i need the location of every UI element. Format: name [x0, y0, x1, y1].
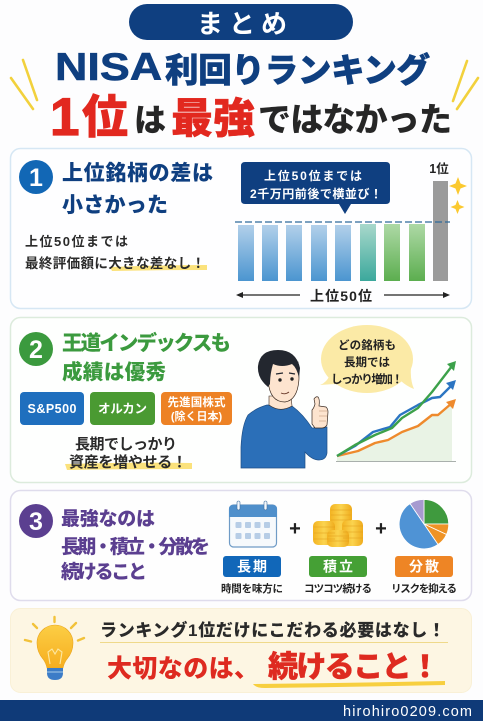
chip: 先進国株式: (除く日本) [171, 409, 222, 423]
callout: 横並び [241, 162, 390, 214]
title line 1 [55, 45, 430, 90]
icon: coins [313, 504, 363, 547]
callout: 横並び: 上位50位までは [264, 168, 362, 183]
footer bar: hirohiro0209.com [343, 704, 472, 720]
title line 1: NISA [55, 45, 162, 88]
number badge 1 [19, 160, 53, 194]
panel 2 heading: 王道インデックスも [62, 331, 231, 355]
chip: 先進国株式 [161, 392, 232, 425]
speech bubble [320, 325, 414, 393]
panel 2 heading: 成績は優秀 [62, 360, 166, 384]
panel 3 background [10, 490, 472, 600]
chip: 積立: 積立 [323, 558, 353, 574]
panel 4: conclusion [10, 608, 472, 692]
plus sign 1: + [289, 518, 301, 540]
panel 2 message: 資産を増やせる！ [69, 453, 187, 471]
plus sign 2: + [375, 518, 387, 540]
panel 2 message: 長期でしっかり [75, 436, 177, 453]
chip: S&amp;P500 [20, 392, 84, 425]
caption: コツコツ続ける: コツコツ続ける [304, 582, 372, 595]
chip: 積立 [309, 556, 367, 577]
title line 2 [50, 88, 452, 147]
panel 1 heading: 上位銘柄の差は [62, 162, 213, 185]
chip: オルカン [90, 392, 155, 425]
panel 1 heading [62, 162, 213, 217]
chip: 長期: 長期 [237, 558, 267, 574]
panel 3 heading: 最強なのは [61, 508, 155, 530]
panel 3: 長期・積立・分散 [10, 490, 472, 600]
accent lines: left [11, 60, 37, 109]
panel 1 body text: 上位50位までは [25, 234, 128, 249]
caption: 時間を味方に: 時間を味方に [221, 582, 283, 595]
divider [100, 642, 448, 644]
panel 2: 王道インデックス [10, 318, 472, 482]
badge: まとめ: まとめ [197, 9, 287, 39]
panel 1: 上位銘柄の差 [10, 148, 472, 308]
chip: 分散 [395, 556, 453, 577]
title line 2: 最強 [171, 95, 255, 142]
title line 1: 利回りランキング [165, 52, 430, 90]
chip: 分散: 分散 [409, 558, 439, 574]
chip: 長期 [223, 556, 281, 577]
panel 3 heading: 長期・積立・分散を [61, 535, 210, 558]
title line 2: 1 [50, 88, 79, 147]
number badge 2 [19, 332, 53, 366]
callout: 横並び: 2千万円前後で横並び！ [250, 186, 382, 201]
panel 3 heading [61, 508, 210, 583]
number badge 2: 2 [29, 336, 43, 364]
badge: まとめ [129, 4, 353, 40]
title line 2: は [134, 102, 166, 138]
panel 1 background [10, 148, 472, 308]
statement line: ランキング1位だけにこだわる必要はなし！ [100, 620, 445, 640]
icon: sparkles [449, 177, 467, 214]
accent lines: right [453, 61, 478, 109]
caption: リスクを抑える: リスクを抑える [391, 582, 457, 595]
conclusion text: 大切なのは、 [107, 655, 259, 683]
title line 2: 位 [82, 91, 128, 143]
panel 1 body text [25, 234, 207, 271]
number badge 3 [19, 504, 53, 538]
bar chart [235, 181, 450, 281]
underline: yellow swoosh [253, 681, 445, 688]
conclusion text [107, 651, 440, 684]
icon: light bulb [25, 617, 84, 680]
label: 1位: 1位 [429, 161, 449, 176]
chip: S&amp;P500: S&P500 [28, 402, 77, 416]
panel 2 background [10, 318, 472, 482]
icon: calendar [229, 501, 277, 547]
icon: pie chart [399, 499, 449, 549]
number badge 3: 3 [29, 508, 43, 536]
line chart [336, 361, 456, 462]
panel 2 heading [62, 331, 231, 384]
speech bubble: どの銘柄も [338, 338, 396, 352]
panel 3 heading: 続けること [61, 561, 147, 583]
panel 1 heading: 小さかった [62, 194, 168, 217]
chip: オルカン: オルカン [98, 402, 147, 416]
panel 2 message [65, 436, 192, 471]
panel 1 body text: 最終評価額に大きな差なし！ [25, 255, 205, 271]
title line 2: ではなかった [258, 101, 452, 138]
panel 4 background [10, 608, 472, 692]
illustration: person [241, 350, 328, 468]
conclusion text: 続けること！ [268, 651, 440, 684]
chip: 先進国株式: 先進国株式 [168, 395, 226, 409]
footer bar [0, 700, 483, 721]
range arrow: 上位50位 [236, 288, 450, 304]
number badge 1: 1 [29, 164, 43, 192]
range arrow: 上位50位: 上位50位 [310, 288, 372, 304]
speech bubble: 長期では [344, 355, 390, 369]
speech bubble: しっかり増加！ [331, 372, 403, 386]
